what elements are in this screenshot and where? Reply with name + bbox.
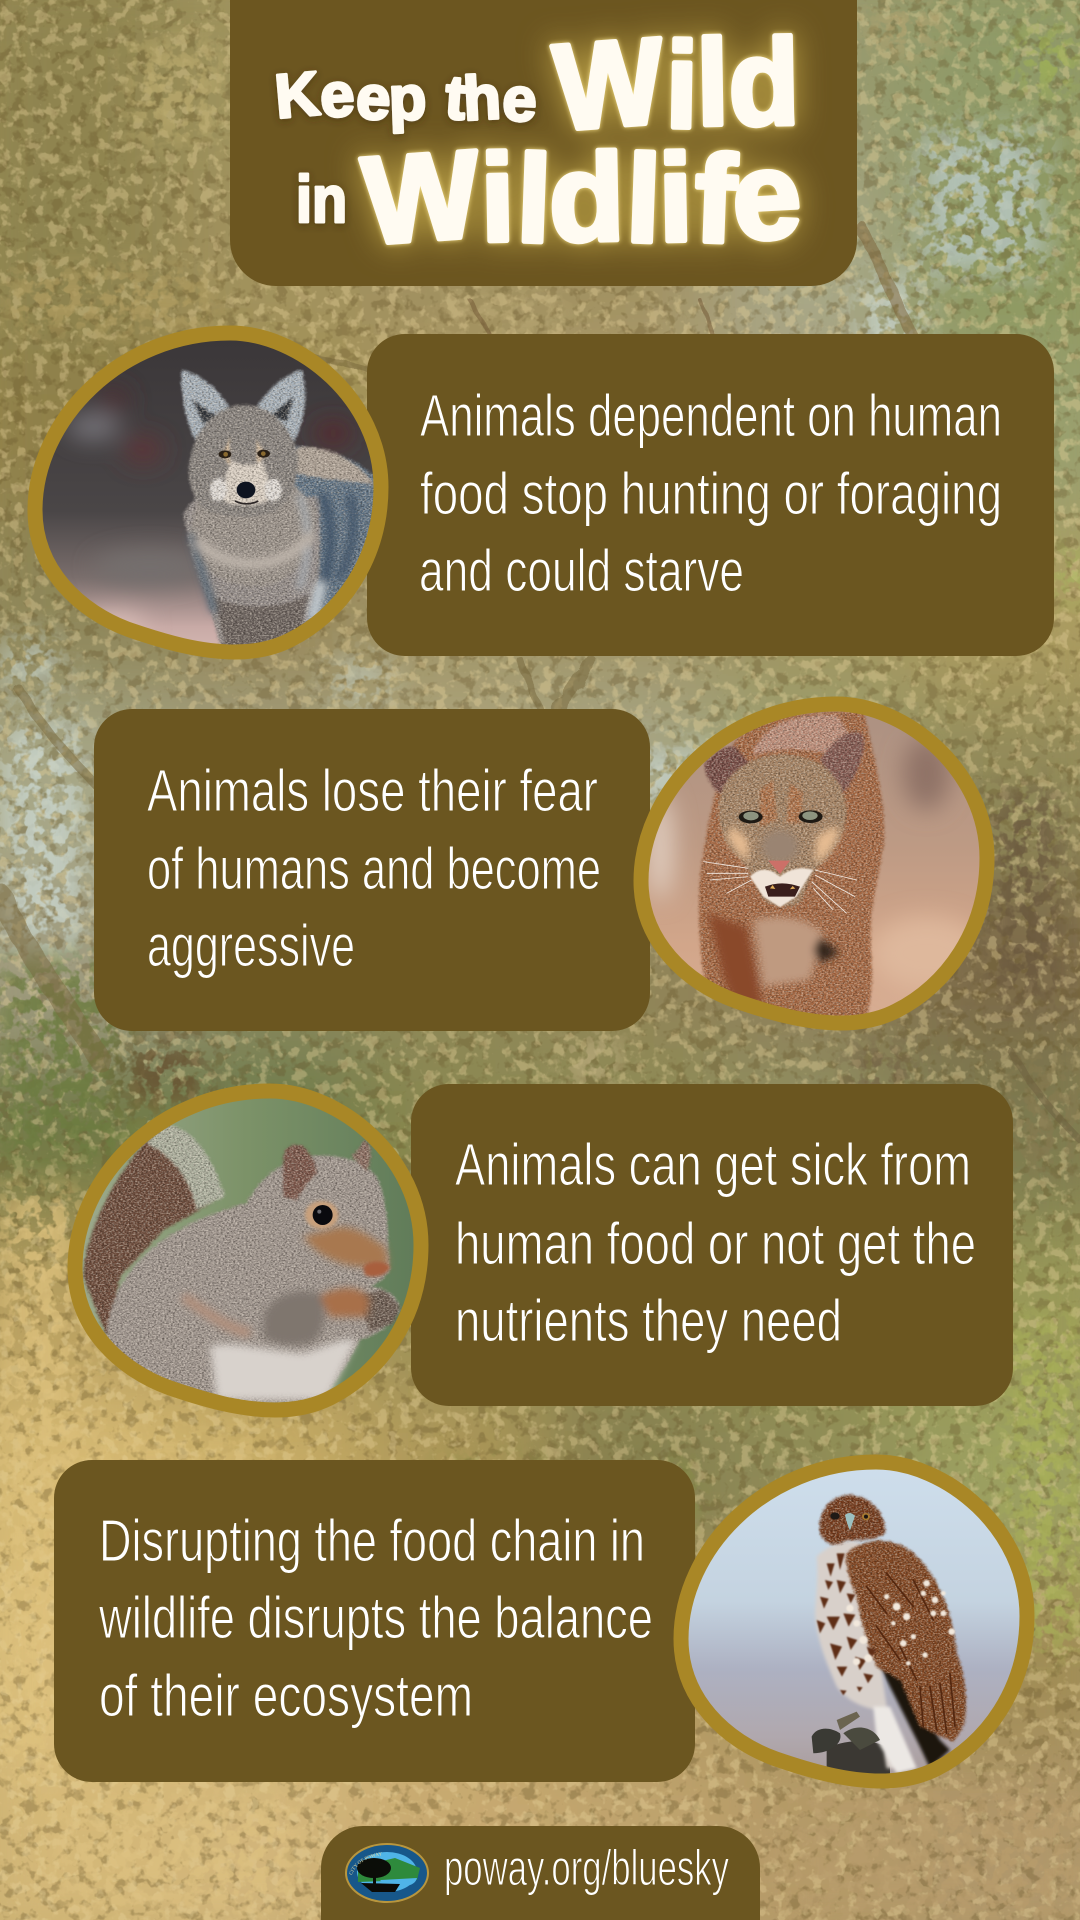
text: panel 1 copy: and could starve [419, 538, 744, 604]
icon: City of Poway seal: CITY OF POWAY [349, 1852, 382, 1874]
text: panel 3 copy: nutrients they need [455, 1288, 842, 1354]
photo: cougar in blob frame [633, 693, 1000, 1030]
heading: Keep the Wild in Wildlife: in [296, 162, 347, 236]
panel: disrupting the food chain [54, 1460, 695, 1782]
panel: animals lose fear of humans [94, 709, 650, 1031]
photo: coyote in blob frame [20, 330, 393, 660]
heading: Keep the Wild in Wildlife [272, 13, 804, 271]
photo: squirrel in blob frame [63, 1080, 430, 1417]
heading: Keep the Wild in Wildlife: Wildlife [358, 125, 804, 271]
text: website: poway.org/bluesky [444, 1840, 729, 1896]
frame: squirrel gold ring [75, 1091, 421, 1410]
icon: City of Poway seal [345, 1843, 429, 1903]
text: panel 4 copy: Disrupting the food chain in [99, 1508, 645, 1574]
text: panel 2 copy: Animals lose their fear [147, 758, 598, 824]
heading: Keep the Wild in Wildlife: Keep the [272, 59, 538, 135]
text: panel 4 copy: of their ecosystem [99, 1663, 473, 1729]
footer panel [321, 1826, 760, 1920]
panel: animals dependent on human food [367, 334, 1054, 656]
text: panel 2 copy: of humans and become [147, 836, 601, 902]
photo: hawk in blob frame [673, 1450, 1040, 1787]
text: panel 2 copy: aggressive [147, 913, 355, 979]
heading: Keep the Wild in Wildlife: Wild [549, 13, 800, 156]
panel: sickness from human food [411, 1084, 1013, 1406]
panel: title [230, 0, 857, 286]
frame: hawk gold ring [681, 1462, 1027, 1781]
frame: cougar gold ring [641, 704, 987, 1023]
text: panel 4 copy: wildlife disrupts the balance [98, 1585, 653, 1651]
frame: coyote gold ring [35, 333, 381, 652]
